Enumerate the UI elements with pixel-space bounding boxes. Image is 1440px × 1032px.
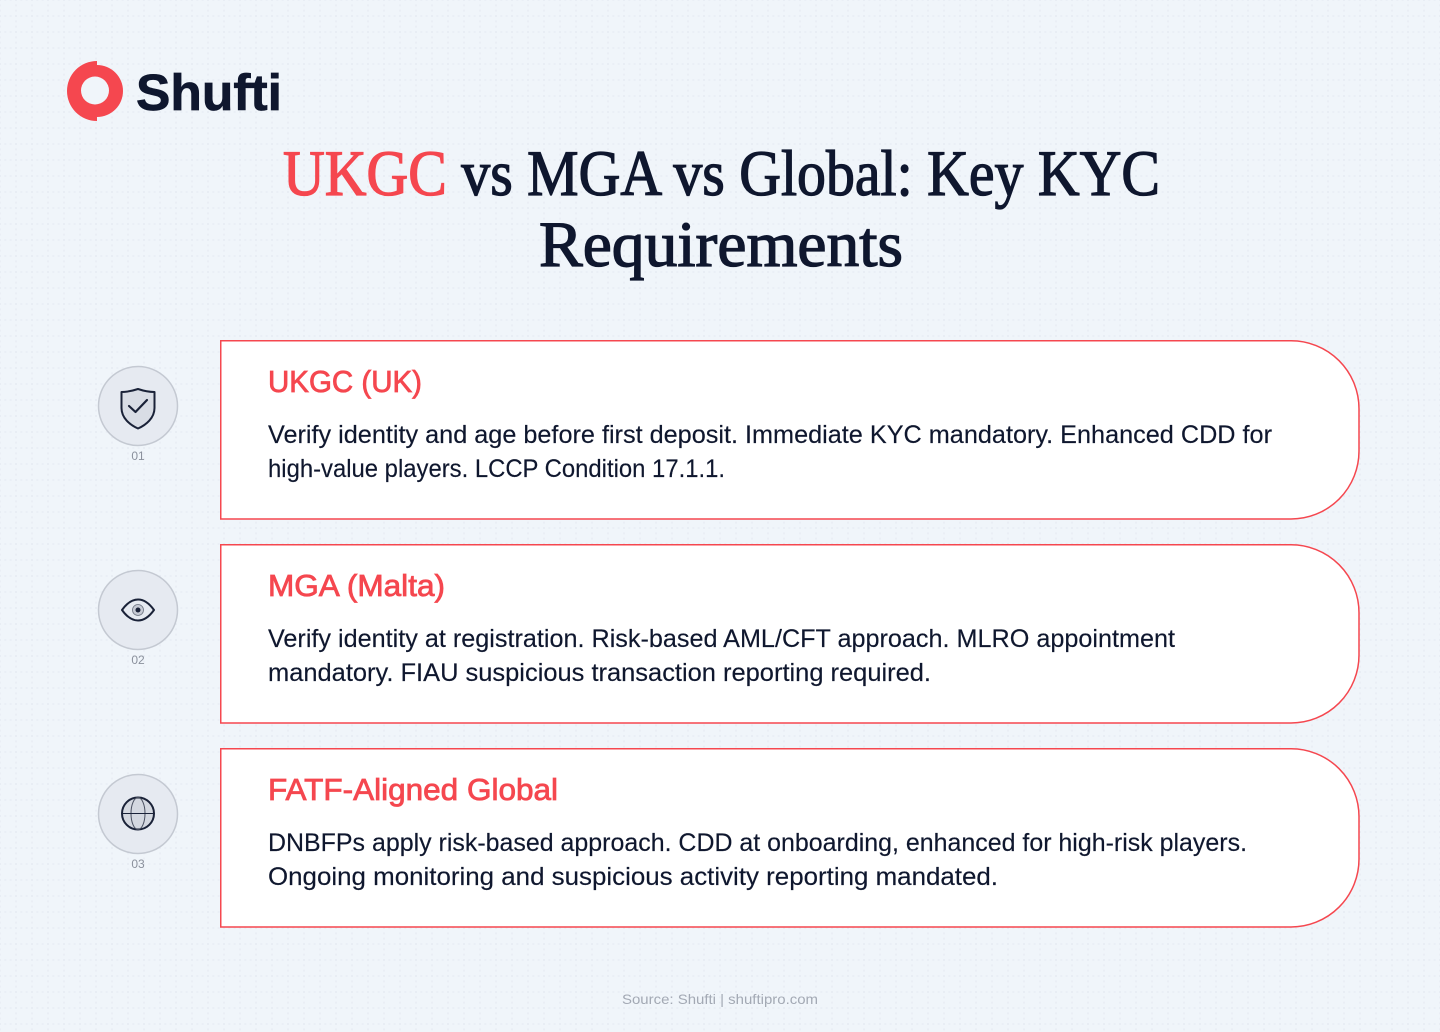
title: UKGC vs MGA vs Global: Key KYC <box>283 138 1160 210</box>
card: MGA <box>221 545 1359 723</box>
card: UKGC <box>221 341 1359 519</box>
heading: MGA (Malta): MGA (Malta) <box>268 568 445 603</box>
icon: logo ring <box>67 61 123 121</box>
source note: Source: Shufti | shuftipro.com <box>622 991 818 1007</box>
body text: FATF: Ongoing monitoring and suspicious activity reporting mandated. <box>268 863 998 891</box>
row 3: FATF-Aligned Global <box>98 749 1359 927</box>
body text: FATF: DNBFPs apply risk-based approach. CDD at onboarding, enhanced for high-risk players. <box>268 829 1247 857</box>
body text: UKGC <box>268 421 1272 483</box>
icon: shield with check <box>98 366 178 446</box>
logo: Shufti <box>67 61 282 121</box>
body text: UKGC: high-value players. LCCP Condition 17.1.1. <box>268 455 725 483</box>
body text: MGA: Verify identity at registration. Risk-based AML/CFT approach. MLRO appointment <box>268 625 1175 653</box>
step number 02: 02 <box>131 653 145 667</box>
row 1: UKGC <box>98 341 1359 519</box>
heading: FATF-Aligned Global: FATF-Aligned Global <box>268 772 558 807</box>
heading: UKGC (UK): UKGC (UK) <box>268 364 422 399</box>
step number 03: 03 <box>131 857 145 871</box>
body text: UKGC: Verify identity and age before first deposit. Immediate KYC mandatory. Enhanced CDD for <box>268 421 1272 449</box>
body text: MGA: mandatory. FIAU suspicious transaction reporting required. <box>268 659 931 687</box>
icon: globe <box>98 774 178 854</box>
body text: MGA <box>268 625 1175 687</box>
icon: eye <box>98 570 178 650</box>
title <box>283 138 1160 281</box>
step number 01: 01 <box>131 449 145 463</box>
title: Requirements <box>539 209 903 281</box>
logo wordmark: Shufti <box>136 64 282 121</box>
card: FATF-Aligned Global <box>221 749 1359 927</box>
row 2: MGA <box>98 545 1359 723</box>
body text: FATF <box>268 829 1247 891</box>
